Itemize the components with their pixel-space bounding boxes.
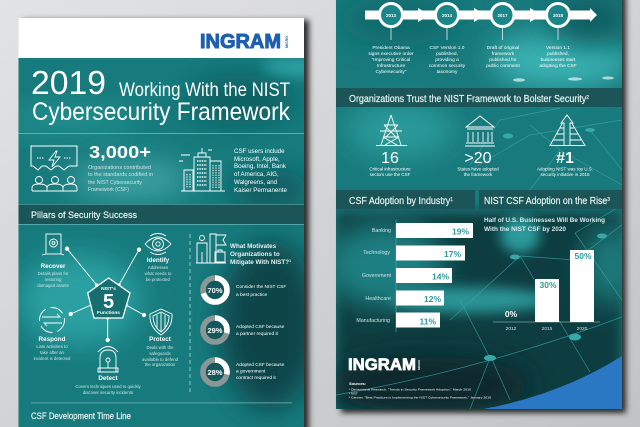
text: 70% label [236, 284, 286, 297]
stat: #1 security initiative [537, 115, 593, 177]
heading: CSF Adoption by Industry: CSF Adoption by Industry [349, 196, 462, 207]
bar: 2012: 2012 [506, 326, 517, 332]
bar: 2015: 30% [539, 280, 557, 290]
header: white logo strip [18, 18, 304, 58]
stat: 3,000+ organizations: the NIST Cybersecurity [88, 180, 142, 186]
milestone: 2017: framework [492, 51, 515, 57]
panel: right poster [325, 0, 635, 413]
milestone: 2017 [486, 4, 520, 69]
bar: Banking: 19% [452, 226, 469, 236]
network lines [336, 108, 622, 409]
bar: Manufacturing [356, 312, 440, 328]
bar: 2012 [505, 309, 518, 332]
stat: 16 critical infrastructure sectors: sectors use the CSF [370, 172, 411, 177]
function: Identify: what needs to [145, 271, 172, 276]
milestone: 2014: common security [429, 63, 466, 69]
bar: 2015: 2015 [542, 326, 553, 332]
heading: Organizations Trust [336, 88, 622, 107]
milestone: 2014 [429, 4, 466, 75]
milestone: 2013: "Improving Critical [372, 57, 410, 63]
bar: Healthcare: Healthcare [365, 296, 391, 302]
function: Identify: Addresses [148, 265, 168, 270]
milestone: 2018: adopting the CSF [539, 63, 577, 69]
function: Recover: Details plans for [38, 271, 69, 276]
stat: >20 states: >20 [464, 150, 492, 167]
panel: what motivates organizations [196, 234, 291, 384]
function: Protect: Deals with the [146, 345, 174, 350]
milestone: 2017: public comment [486, 63, 520, 69]
function: Identify: Identify [147, 257, 170, 264]
milestone: 2018: published, [547, 51, 569, 57]
heading: CSF Development Time Line: CSF Development Time Line [31, 411, 131, 422]
poster background glow [0, 58, 320, 410]
title [32, 70, 290, 125]
milestone: 2018 [539, 4, 577, 69]
function: Protect [142, 309, 179, 367]
icon: audience with lightning speech bubble [31, 146, 77, 191]
text: CSF users: CSF users include [234, 148, 285, 155]
function: Detect [75, 346, 141, 395]
bar: 2020: 50% [574, 251, 592, 261]
bar: 2015 [535, 279, 559, 332]
stat: 3,000+ organizations: 3,000+ [89, 142, 151, 162]
text: sources: ³ Gartner, "Best Practices in Implementing the NIST Cybersecurity Framework," January 2016 [349, 396, 491, 400]
milestone: 2013: Cybersecurity" [375, 69, 407, 75]
stat: >20 states: States have adopted [457, 166, 499, 172]
pentagon [88, 278, 130, 318]
milestone: 2018: businesses start [541, 57, 576, 63]
function: Protect: Protect [149, 336, 172, 343]
stat: 3,000+ organizations: to the standards codified in [88, 172, 153, 178]
bar: 2020: 2020 [577, 326, 588, 332]
logo: Ingram Micro white: MICRO [417, 359, 421, 370]
function: Recover: damaged assets [37, 283, 69, 288]
timeline arrow [365, 4, 597, 75]
bar: Government: 14% [432, 272, 449, 282]
milestone: 2018: 2018 [553, 13, 564, 18]
logo: Ingram Micro [200, 34, 288, 48]
function: Recover: restoring [45, 277, 62, 282]
text: sources: ¹ Dimensional Research, "Trends in Security Framework Adoption," March 2016 [349, 388, 471, 392]
stat: #1 security initiative: Adopting NIST was top U.S. [537, 166, 593, 172]
donut: 28% [203, 360, 227, 384]
milestone: 2017: published for [489, 57, 517, 63]
donut: 70% [203, 278, 227, 302]
blue corner curve [483, 356, 622, 409]
milestone: 2014: 2014 [442, 13, 453, 18]
heading: CSF Adoption by Industry: 1 [450, 197, 453, 203]
title: 2019 [31, 64, 106, 101]
text: half of businesses [484, 217, 605, 233]
bar: Technology: Technology [363, 250, 390, 256]
bar: Banking [372, 223, 473, 238]
stat: >20 states: the framework [464, 172, 493, 177]
donut: 29%: 29% [207, 326, 223, 335]
heading: Pillars of Security Success [18, 204, 304, 225]
text: CSF users: Walgreens, and [234, 179, 278, 186]
heading: Pillars of Security Success: Pillars of Security Success [31, 210, 137, 221]
stat: #1 security initiative: security initiative in 2018 [540, 172, 590, 177]
logo: Ingram Micro: MICRO [285, 36, 289, 48]
heading: Organizations Trust: 2 [586, 95, 589, 101]
text: 29% label: Adopted CSF because [236, 324, 285, 330]
logo: Ingram Micro white: INGRAM [348, 355, 416, 374]
milestone: 2018: Version 1.1 [546, 45, 570, 51]
stat: #1 security initiative: #1 [556, 150, 574, 167]
text: 29% label: a partner required it [236, 331, 279, 337]
text: CSF users: Microsoft, Apple, [234, 156, 280, 163]
function: Respond: incident is detected [34, 356, 71, 361]
diagram: NIST 5 functions [34, 234, 179, 395]
bar: Healthcare: 12% [424, 294, 441, 304]
text: sources [349, 381, 491, 400]
panel: left poster [18, 18, 304, 427]
poster background texture [325, 0, 635, 413]
stat: 3,000+ organizations [88, 142, 153, 193]
stat: 3,000+ organizations: Organizations contributed [88, 165, 151, 171]
milestone: 2013: 2013 [386, 13, 397, 18]
milestone: 2013: signs executive order [368, 51, 414, 57]
milestone: 2013: Infrastructure [377, 63, 405, 69]
heading: CSF Adoption by Industry [336, 190, 475, 209]
panel: what motivates organizations: Organizations to [230, 251, 280, 258]
logo: Ingram Micro: INGRAM [200, 31, 281, 53]
text: half of businesses: With the NIST CSF by 2020 [484, 226, 566, 233]
text: half of businesses: Half of U.S. Businesses Will Be Working [484, 217, 605, 224]
milestone: 2013: President Obama [372, 45, 410, 51]
function: Respond [34, 308, 71, 361]
pentagon: NIST's [101, 286, 116, 292]
milestone: 2014: CSF Version 1.0 [430, 45, 465, 51]
title: Working With the NIST [119, 79, 290, 101]
stat: 16 critical infrastructure sectors: 16 [381, 150, 399, 167]
milestone: 2014: taxonomy [437, 69, 458, 75]
heading: NIST CSF Adoption on the Rise: 3 [607, 197, 610, 203]
donut: 29% [203, 318, 227, 342]
connectors [65, 247, 146, 342]
function: Detect: Detect [98, 375, 119, 382]
stat: 16 critical infrastructure sectors [369, 115, 411, 177]
function: Protect: available to defend [142, 357, 179, 362]
title: Cybersecurity Framework [32, 98, 290, 126]
function: Identify: be protected [146, 277, 171, 282]
function: Detect: Covers techniques used to quickly [75, 384, 141, 389]
function: Protect: safeguards [149, 351, 171, 356]
text: CSF users: Kaiser Permanente [234, 187, 288, 194]
panel: what motivates organizations: What Motivates [230, 243, 277, 250]
text: 28% label: Adopted CSF because [236, 362, 285, 368]
text: CSF users: of America, AIG, [234, 171, 279, 178]
text: 70% label: Consider the NIST CSF [236, 284, 286, 290]
bar: Government [362, 268, 452, 283]
function: Recover: Recover [41, 263, 66, 270]
bar: Technology [363, 246, 465, 260]
panel: what motivates organizations: Mitigate With NIST? [230, 259, 289, 266]
function: Respond: Lists activities to [36, 344, 68, 349]
text: CSF users: Boeing, Intel, Bank [234, 163, 287, 170]
milestone: 2014: published, [436, 51, 458, 57]
function: Protect: the organization [145, 362, 176, 367]
donut: 28%: 28% [207, 368, 223, 377]
text: 29% label [236, 324, 284, 336]
bar: Manufacturing: 11% [419, 316, 436, 326]
stat: 16 critical infrastructure sectors: Critical infrastructure [369, 166, 411, 172]
bar chart: adoption on the rise [493, 250, 600, 332]
stat: 3,000+ organizations: Framework (CSF) [88, 187, 129, 193]
heading: NIST CSF Adoption on the Rise: NIST CSF Adoption on the Rise [484, 196, 624, 207]
milestone: 2017: 2017 [497, 13, 508, 18]
icon: city buildings [179, 148, 225, 191]
pentagon: 5 [103, 291, 114, 313]
bar: Technology: 17% [444, 249, 461, 259]
bar: Government: Government [362, 273, 392, 279]
text: CSF users [234, 148, 288, 194]
function: Identify [145, 234, 172, 282]
text: 28% label: contract required it [236, 375, 276, 381]
function: Detect: discover security incidents [83, 390, 133, 395]
text: sources: Sources: [349, 381, 366, 386]
panel: what motivates organizations: 1 [289, 259, 291, 263]
function: Respond: Respond [39, 336, 66, 343]
milestone: 2017: Draft of original [487, 45, 519, 51]
function: Recover [37, 234, 69, 288]
bar: Healthcare [365, 290, 444, 306]
text: 28% label: a government [236, 368, 266, 374]
icon: person with flag and briefcase [196, 234, 226, 263]
text: 70% label: a best practice [236, 292, 268, 298]
bar chart: adoption by industry [356, 220, 473, 332]
milestone: 2013 [368, 4, 414, 75]
donut: 70%: 70% [207, 286, 223, 295]
stat: >20 states [457, 116, 499, 177]
pentagon: Functions [97, 310, 120, 316]
bar: 2012: 0% [505, 309, 518, 319]
heading: NIST CSF Adoption on the Rise [479, 190, 622, 209]
text: 28% label [236, 362, 285, 381]
function: Respond: take after an [40, 350, 65, 355]
heading: Organizations Trust: Organizations Trust the NIST Framework to Bolster Security [349, 94, 614, 105]
bar: 2020 [570, 250, 594, 332]
milestone: 2014: providing a [435, 57, 459, 63]
bar: Banking: Banking [372, 228, 391, 234]
bar: Manufacturing: Manufacturing [356, 318, 390, 324]
text: sources: ² NIST [349, 392, 358, 396]
